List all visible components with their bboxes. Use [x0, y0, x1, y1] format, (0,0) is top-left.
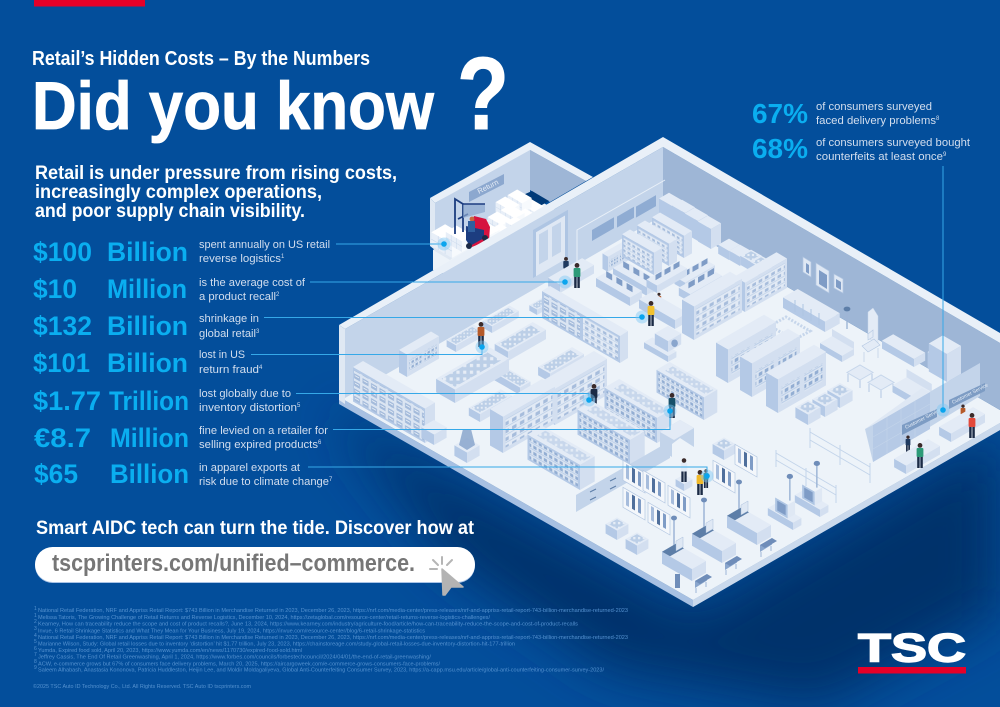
sign: Return: [469, 174, 504, 202]
stat: delivery problems: 8: [936, 116, 940, 122]
display cubes: [827, 383, 853, 408]
logo: TSC: [858, 626, 966, 674]
stat: reverse logistics: spent annually on US retail: [199, 239, 330, 251]
stat: apparel exports: [34, 459, 333, 489]
stat: delivery problems: of consumers surveyed: [816, 101, 932, 113]
signs: Customer Service: [902, 382, 990, 435]
stat: expired products fine: 6: [318, 440, 322, 446]
intro paragraph: and poor supply chain visibility.: [35, 201, 305, 222]
bottle stand: [454, 429, 480, 463]
signs: Customer Service: Customer Service: [904, 407, 943, 431]
grocery department: [353, 286, 717, 490]
signs: Customer Service: Customer Service: [951, 382, 990, 406]
stat: reverse logistics: $100: [33, 237, 92, 267]
stat: shrinkage: [33, 311, 260, 341]
eyebrow heading: Retail’s Hidden Costs – By the Numbers: [32, 48, 370, 70]
stat: expired products fine: selling expired products: [199, 439, 319, 451]
intro paragraph: increasingly complex operations,: [35, 182, 322, 203]
forklift: [455, 199, 490, 249]
pallets of returned goods: [431, 190, 545, 260]
stat: expired products fine: Million: [110, 423, 189, 453]
footnotes: 4: [34, 633, 37, 639]
stat: apparel exports: 7: [329, 477, 333, 483]
tall cabinets: [716, 315, 776, 383]
stat: counterfeits: 9: [943, 152, 947, 158]
store walls and floor: [339, 137, 1000, 607]
footnotes: Jeffrey Cassis, The End Of Retail Greenwashing, April 1, 2024, https://www.forbes.com/councils/forbestechcouncil/2024/04/01/the-end-of-retail-greenwashing/: [38, 654, 432, 660]
wall panels: [592, 193, 656, 243]
stat: product recall: 2: [276, 292, 280, 298]
service counters and people: [906, 436, 910, 453]
footnotes: National Retail Federation, NRF and Appriss Retail Report: $743 Billion in Merchandise Returned in 2023, December 26, 2023, https://nrf.com/media-center/press-releases/nrf-and-appriss-retail-report-743-billion-merchandise-returned-2023: [38, 608, 628, 614]
staff at service desk: [563, 257, 569, 277]
footnotes: Kearney, How can traceability reduce the scope and cost of product recalls?, June 13, 2024, https://www.kearney.com/industry/agriculture-food/article/how-can-traceability-reduce-the-scope-and-cost-of-product-recalls: [38, 622, 579, 628]
question mark: ?: [457, 36, 509, 151]
footnotes: 2: [34, 619, 37, 625]
lockers: [865, 388, 930, 462]
fitting rooms: [660, 420, 694, 457]
aisle gondolas: [656, 362, 717, 420]
footnotes: Yumda, Expired food sold, April 20, 2023, https://www.yumda.com/en/news/1170730/expired-food-sold.html: [38, 648, 302, 654]
stat: reverse logistics: [33, 237, 330, 267]
stat: shrinkage: shrinkage in: [199, 313, 259, 325]
self-checkout kiosks: [768, 461, 828, 530]
low partition: [576, 441, 670, 512]
stat: inventory distortion: [33, 386, 301, 416]
fridge wall: [353, 361, 435, 443]
sign: Return: Return: [476, 178, 500, 196]
stat: return fraud: return fraud: [199, 364, 259, 376]
stat: counterfeits: counterfeits at least once: [816, 151, 943, 163]
stat: reverse logistics: Billion: [107, 237, 188, 267]
footnotes: 6: [34, 646, 37, 652]
long central gondola: [542, 351, 607, 425]
queue barriers: [776, 428, 870, 503]
door: [533, 210, 568, 278]
stat: expired products fine: €8.7: [34, 423, 91, 453]
stat: inventory distortion: Trillion: [109, 386, 189, 416]
call to action button: tscprinters.com/unified–commerce.: [52, 550, 415, 577]
right stats: [752, 98, 970, 164]
apparel department: [576, 420, 757, 555]
refrigerated bank: [542, 286, 628, 363]
mannequin: [676, 458, 692, 491]
wall frames: [803, 257, 843, 293]
stat: shrinkage: 3: [256, 329, 260, 335]
stat: counterfeits: of consumers surveyed bought: [816, 137, 970, 149]
footnotes: Saleem Alhabash, Anastasia Kononova, Patricia Huddleston, Heijin Lee, and Moldir Moldagaliyeva, Global Anti-Counterfeiting Consumer Survey, 2023, https://a-capp.msu.edu/article/global-anti-counterfeiting-consumer-survey-2023/: [38, 668, 605, 674]
wire rack: [399, 331, 439, 377]
checkout stations: [662, 480, 777, 593]
footnotes: 1: [34, 606, 37, 612]
stat: expired products fine: [34, 423, 328, 453]
footnotes: 3: [34, 626, 37, 632]
stat: product recall: [33, 274, 306, 304]
footnotes: Melissa Tatoris, The Growing Challenge of Retail Returns and Reverse Logistics, December 10, 2024, https://zetaglobal.com/resource-center/retail-returns-reverse-logistics-challenges/: [38, 615, 491, 621]
title: Did you know: [32, 68, 435, 144]
stat: delivery problems: faced delivery problems: [816, 115, 937, 127]
intro paragraph: Retail is under pressure from rising costs,: [35, 163, 397, 184]
customer in green: [574, 263, 580, 288]
copyright: ©2025 TSC Auto ID Technology Co., Ltd. All Rights Reserved. TSC Auto ID tscprinters.com: [33, 683, 251, 690]
stat: return fraud: $101: [33, 348, 90, 378]
stat: inventory distortion: $1.77: [33, 386, 101, 416]
intro paragraph: [35, 163, 397, 222]
footnotes: 5: [34, 639, 37, 645]
stat: apparel exports: risk due to climate change: [199, 476, 329, 488]
logo: TSC: TSC: [858, 626, 966, 670]
footnotes: [34, 606, 628, 674]
mirror: [868, 308, 878, 344]
stat: expired products fine: fine levied on a retailer for: [199, 425, 328, 437]
stat: return fraud: Billion: [107, 348, 188, 378]
stat: delivery problems: [752, 98, 940, 129]
footnotes: Invue, 6 Retail Shrinkage Statistics and What They Mean for Your Business, July 19, 2024, https://invue.com/resource-center/blog/6-retail-shrinkage-statistics: [38, 628, 426, 634]
stat: inventory distortion: 5: [297, 403, 301, 409]
stat: apparel exports: in apparel exports at: [199, 462, 300, 474]
stat: counterfeits: 68%: [752, 133, 808, 164]
stat: return fraud: [33, 348, 263, 378]
stat: apparel exports: $65: [34, 459, 78, 489]
back wall fixtures: [533, 180, 843, 293]
appliances along the back wall: [659, 193, 772, 277]
illustration: isometric retail store: [339, 137, 1000, 607]
furniture department: [716, 289, 946, 425]
stat: reverse logistics: reverse logistics: [199, 253, 282, 265]
stat: delivery problems: 67%: [752, 98, 808, 129]
stat: return fraud: lost in US: [199, 349, 245, 361]
partition wall: [865, 363, 980, 462]
electronics department: [548, 212, 787, 362]
stat: shrinkage: Billion: [107, 311, 188, 341]
stat: apparel exports: Billion: [110, 459, 189, 489]
footnotes: 7: [34, 652, 37, 658]
stat: shrinkage: global retail: [199, 328, 256, 340]
leader lines and location pins: [251, 166, 950, 482]
return room: [430, 142, 593, 290]
footnotes: National Retail Federation, NRF and Appriss Retail Report: $743 Billion in Merchandise Returned in 2023, December 26, 2023, https://nrf.com/media-center/press-releases/nrf-and-appriss-retail-report-743-billion-merchandise-returned-2023: [38, 635, 628, 641]
call to action button: [35, 547, 475, 595]
footnotes: 9: [34, 665, 37, 671]
footnotes: 1: [34, 613, 37, 619]
stat: inventory distortion: inventory distortion: [199, 402, 297, 414]
customer with vest: [478, 322, 484, 347]
stat: product recall: Million: [107, 274, 187, 304]
stat list: [33, 237, 333, 489]
stat: product recall: a product recall: [199, 291, 276, 303]
stat: reverse logistics: 1: [281, 254, 285, 260]
stat: shrinkage: $132: [33, 311, 92, 341]
footnotes: Marianne Wilson, Study: Global retail losses due to inventory ‘distortion’ hit $1.77 trillion, July 23, 2023, https://chainstoreage.com/study-global-retail-losses-due-inventory-distortion-hit-177-trillion: [38, 642, 515, 648]
footnotes: 8: [34, 659, 37, 665]
stat: return fraud: 4: [259, 365, 263, 371]
call to action heading: Smart AIDC tech can turn the tide. Discover how at: [36, 518, 475, 539]
footnotes: ACW, e-commerce grows but 67% of consumers face delivery problems, March 20, 2025, https://aircargoweek.com/e-commerce-grows-consumers-face-problems/: [38, 662, 441, 668]
stat: counterfeits: [752, 133, 970, 164]
stat: product recall: $10: [33, 274, 77, 304]
stat: product recall: is the average cost of: [199, 277, 306, 289]
red top bar: [34, 0, 145, 6]
floor lamp: [844, 307, 850, 329]
customer service area: [865, 335, 990, 474]
icon: click cursor: [430, 557, 463, 595]
stat: inventory distortion: lost globally due to: [199, 388, 291, 400]
